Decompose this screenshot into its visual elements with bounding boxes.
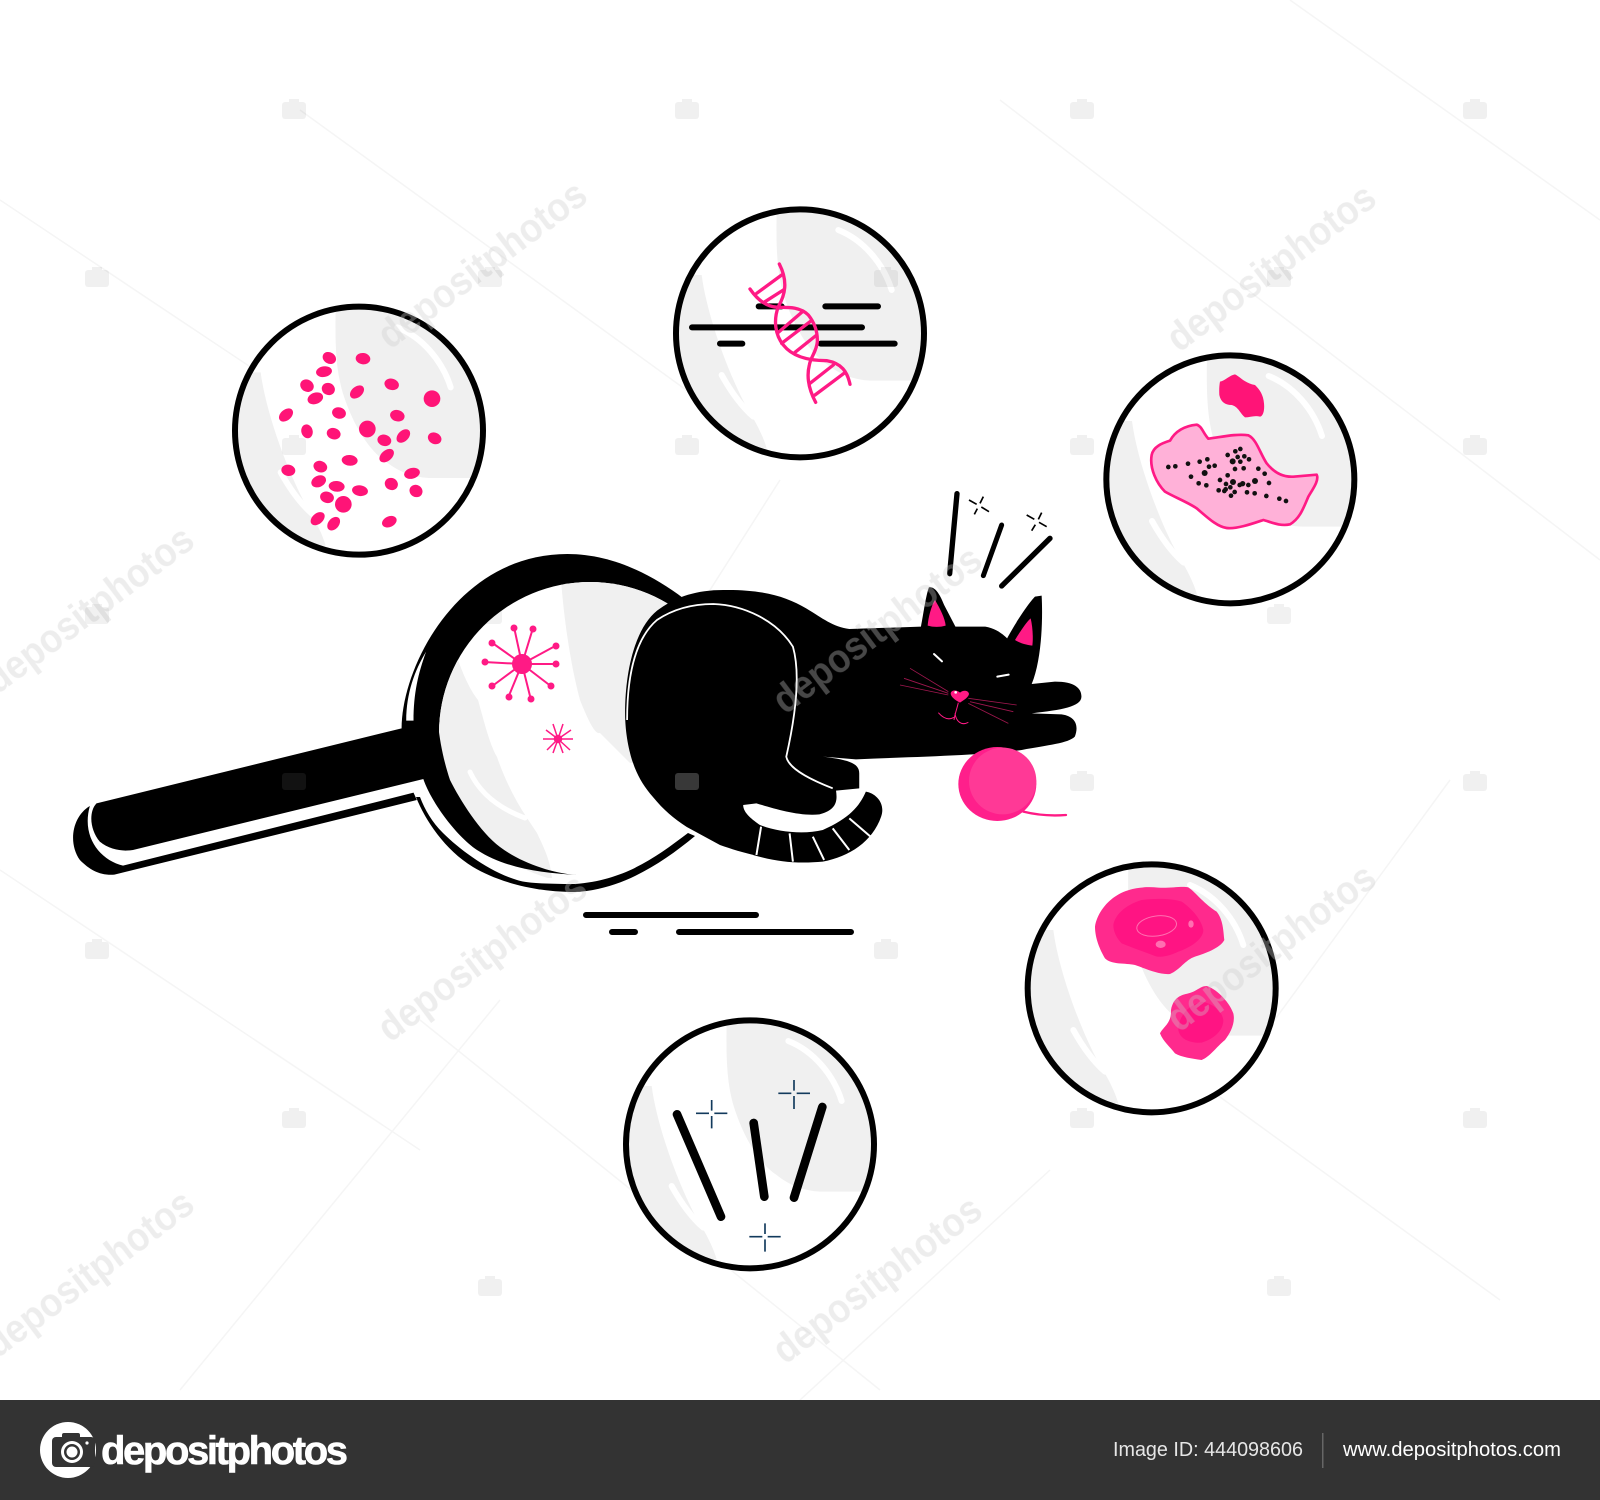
circle: DNA helix (667, 200, 933, 457)
website url: www.depositphotos.com (1342, 1439, 1561, 1461)
footer bar (0, 1400, 1600, 1500)
lens outer arc (416, 797, 695, 892)
circle: pink tissue with black dots (1097, 346, 1364, 603)
cat ears (928, 600, 1033, 646)
watermark: depositphotos (764, 537, 990, 722)
camera icons on dark areas (282, 773, 699, 790)
sparkles (969, 497, 1047, 531)
watermark: depositphotos (1158, 855, 1384, 1040)
cat face and yarn (900, 494, 1066, 821)
watermark: depositphotos (369, 865, 595, 1050)
cat eyes (934, 654, 1009, 677)
surprise lines (950, 494, 1050, 586)
watermark: depositphotos (369, 172, 595, 357)
logo wordmark: depositphotos (101, 1429, 348, 1473)
cat tail (753, 792, 882, 863)
watermark: depositphotos (1158, 175, 1384, 360)
cat nose and mouth (938, 690, 969, 724)
magnifier glass (439, 582, 668, 878)
magnifying glass (73, 554, 750, 895)
circle: pink cells (226, 297, 492, 555)
image id: Image ID: 444098606 (1113, 1439, 1303, 1461)
cat (625, 587, 1081, 863)
pink spiky cell, small (543, 724, 573, 753)
yarn ball (958, 747, 1066, 821)
logo icon (40, 1422, 96, 1478)
lens inner crescent (420, 723, 577, 875)
watermark camera icons (85, 99, 1487, 1296)
watermark: depositphotos (764, 1187, 990, 1372)
cat whiskers (900, 668, 1017, 723)
circle: black rods with sparkles (617, 1011, 883, 1268)
circle: pink blobs (1018, 855, 1285, 1112)
cat body (625, 587, 1081, 856)
motion lines under magnifier (586, 915, 851, 932)
magnifier rim and handle (73, 554, 690, 875)
pink spiky cell, large (482, 626, 558, 702)
watermark (0, 172, 1384, 1372)
